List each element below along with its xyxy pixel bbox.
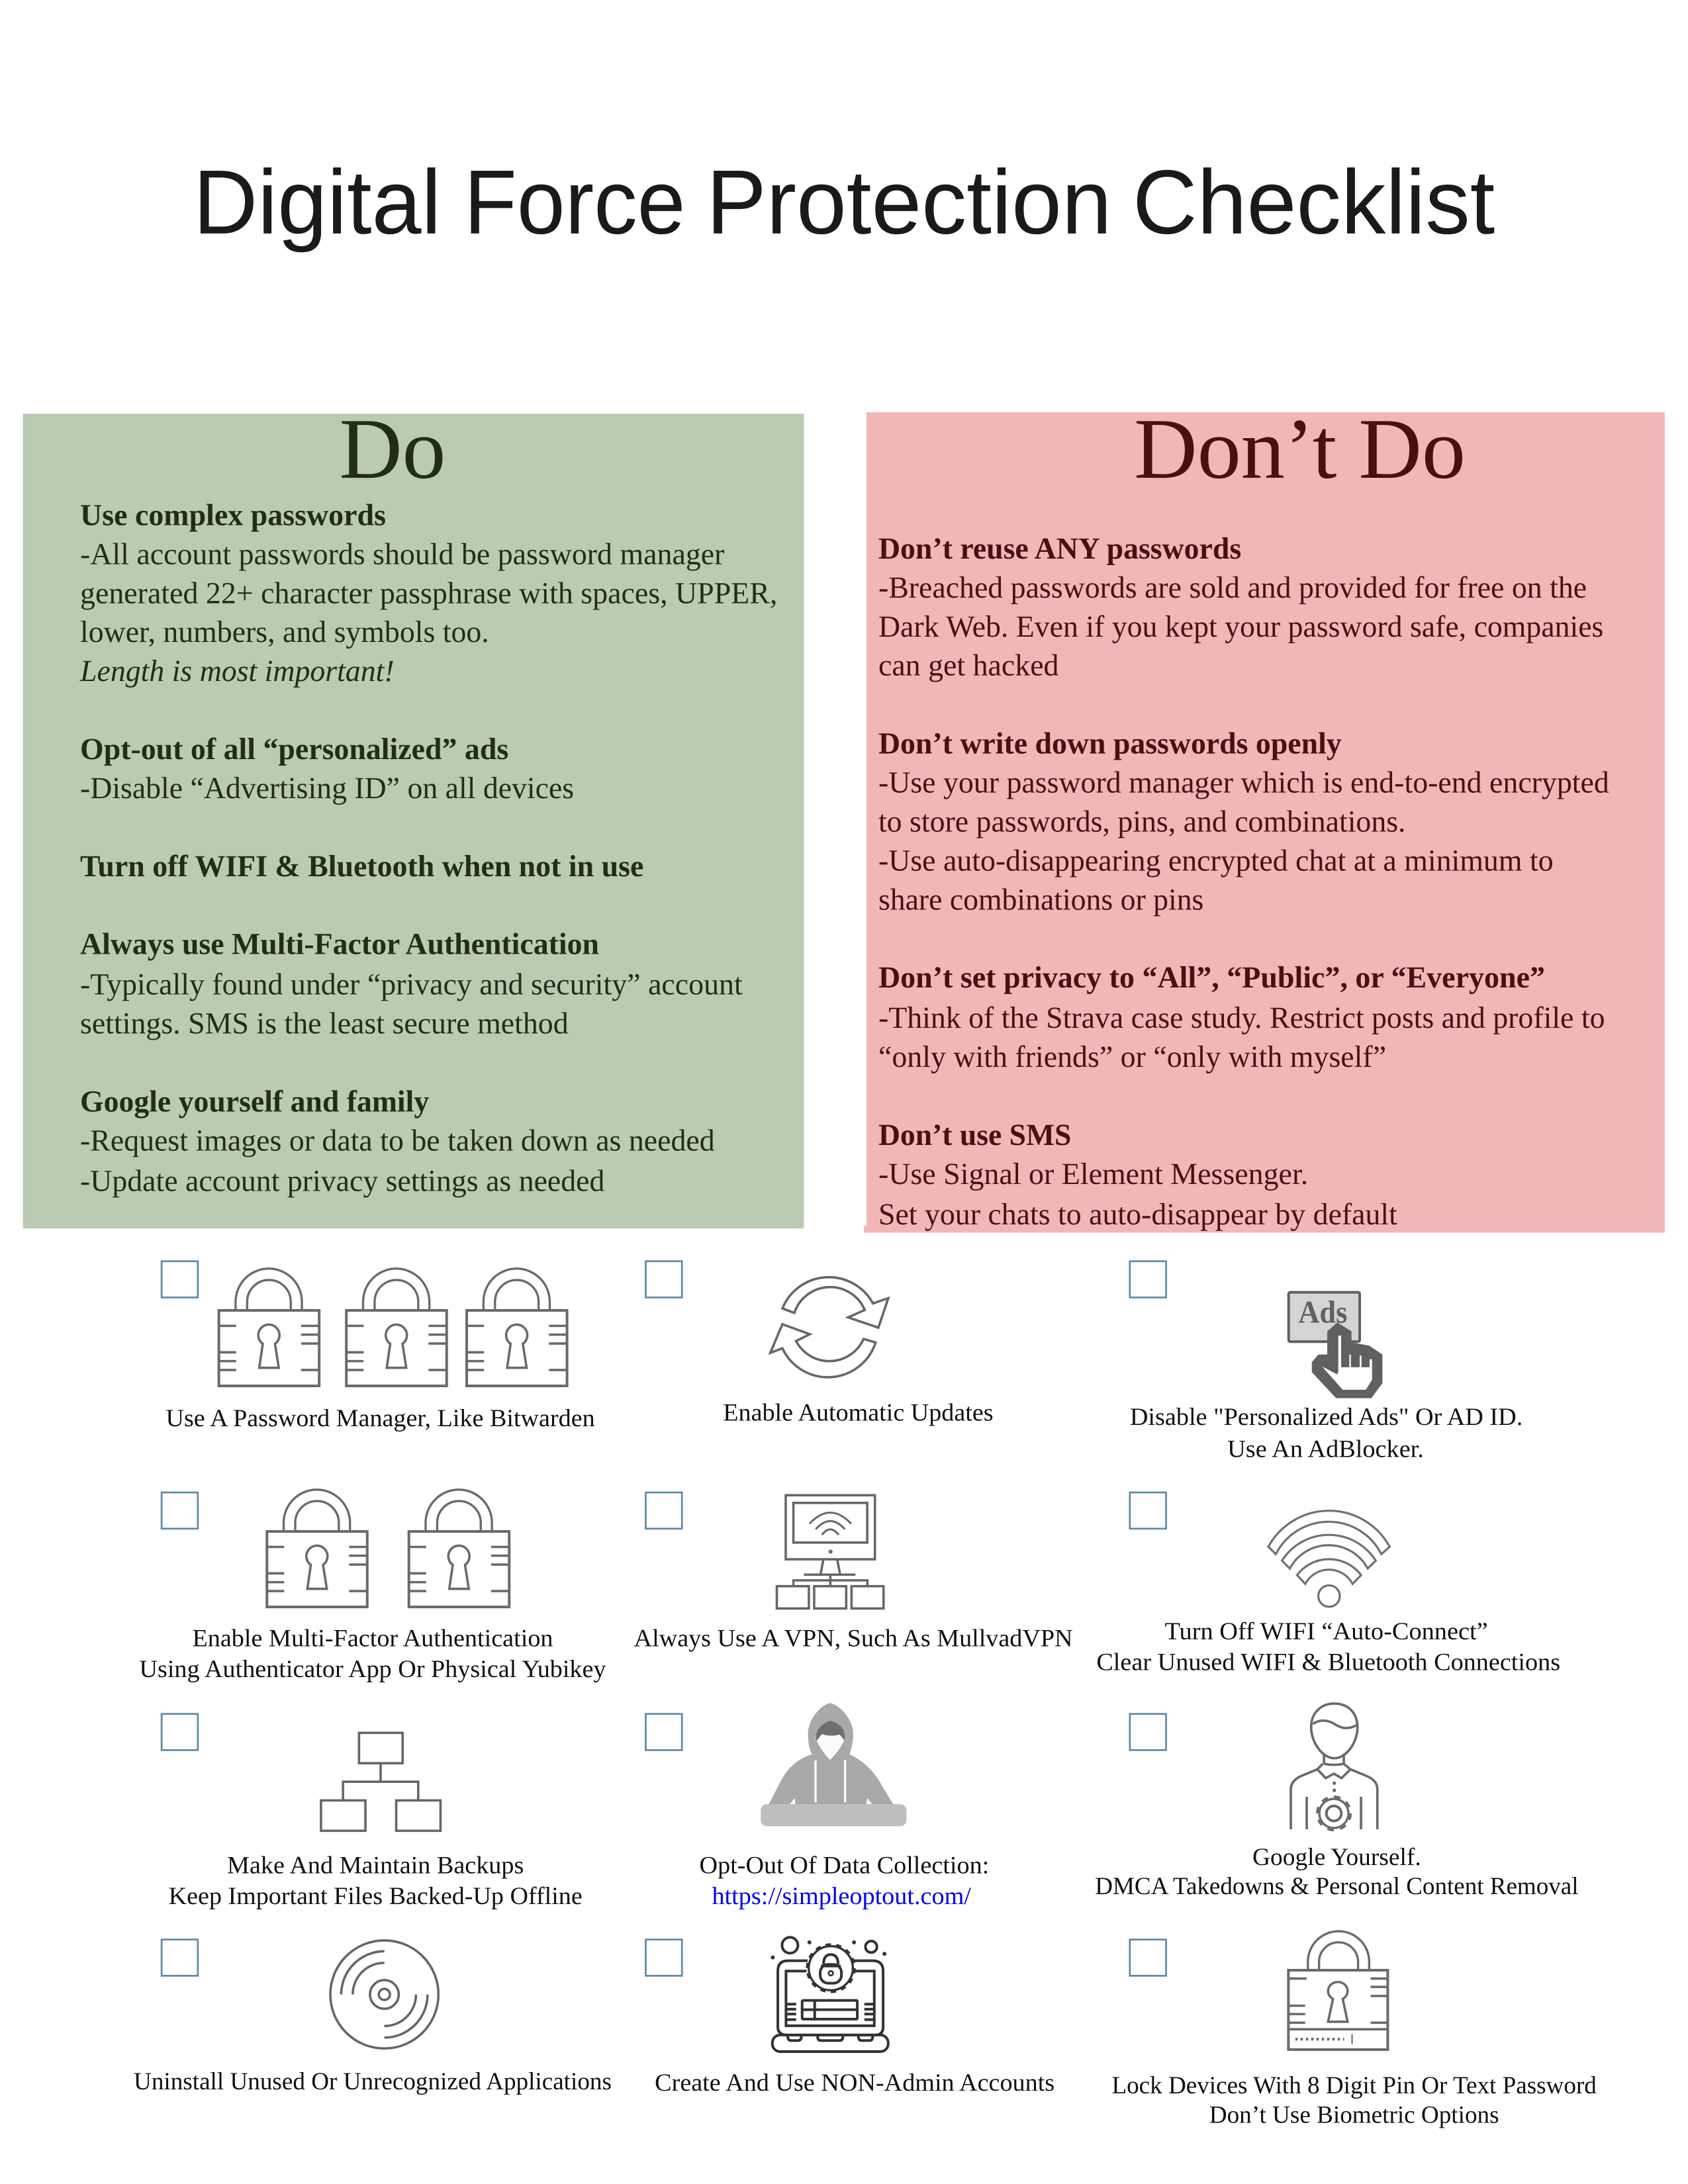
label: Keep Important Files Backed-Up Offline	[169, 1882, 583, 1909]
do item: multi-factor	[80, 927, 743, 1040]
label: Create And Use NON-Admin Accounts	[655, 2068, 1055, 2096]
label: Make And Maintain Backups	[227, 1851, 524, 1879]
title: Protection	[706, 152, 1111, 253]
label: Turn Off WIFI “Auto-Connect”	[1164, 1617, 1488, 1645]
label	[700, 1851, 989, 1909]
do item: complex passwords: generated 22+ character passphrase with spaces, UPPER,	[80, 575, 777, 610]
checkbox	[162, 1492, 198, 1529]
icon: laptop with gear lock	[771, 1937, 888, 2052]
don't item: reuse: -Breached passwords are sold and provided for free on the	[878, 570, 1587, 604]
do item: multi-factor: Always use Multi-Factor Authentication	[80, 927, 599, 961]
don't item: reuse	[878, 531, 1603, 682]
checkbox	[1130, 1261, 1166, 1297]
label: Lock Devices With 8 Digit Pin Or Text Password	[1111, 2071, 1597, 2099]
checkbox	[645, 1261, 682, 1297]
don't item: privacy	[878, 960, 1605, 1074]
icon: padlock with pin field	[1288, 1931, 1387, 2050]
don't item: reuse: Dark Web. Even if you kept your password safe, companies	[878, 609, 1603, 643]
label	[1130, 1402, 1523, 1463]
don't item: sms: -Use Signal or Element Messenger.	[878, 1156, 1308, 1191]
icon: hooded figure	[761, 1703, 906, 1826]
checkbox	[645, 1940, 682, 1976]
label: Clear Unused WIFI & Bluetooth Connections	[1096, 1648, 1560, 1676]
do item: complex passwords: Use complex passwords	[80, 497, 387, 532]
label: Disable "Personalized Ads" Or AD ID.	[1130, 1402, 1523, 1430]
label: Google Yourself.	[1252, 1843, 1421, 1870]
don't item: privacy: -Think of the Strava case study. Restrict posts and profile to	[878, 1000, 1605, 1035]
label	[1111, 2071, 1597, 2128]
checkbox	[1130, 1492, 1166, 1529]
don't item: write down: -Use auto-disappearing encrypted chat at a minimum to	[878, 842, 1554, 878]
checkbox	[162, 1714, 198, 1750]
label: Using Authenticator App Or Physical Yubikey	[139, 1655, 606, 1682]
label: DMCA Takedowns & Personal Content Removal	[1095, 1872, 1579, 1900]
don't item: privacy: Don’t set privacy to “All”, “Public”, or “Everyone”	[878, 960, 1545, 995]
title: Digital	[193, 152, 442, 253]
label: Always Use A VPN, Such As MullvadVPN	[634, 1624, 1073, 1652]
icon: monitor network	[777, 1495, 884, 1608]
label	[1096, 1617, 1560, 1676]
label: Uninstall Unused Or Unrecognized Applications	[134, 2067, 612, 2095]
do item: complex passwords: Length is most important!	[79, 653, 395, 688]
label: Don’t Use Biometric Options	[1209, 2101, 1499, 2128]
don't item: sms	[878, 1117, 1397, 1231]
do item: multi-factor: settings. SMS is the least secure method	[80, 1006, 569, 1040]
don't item: write down: Don’t write down passwords openly	[878, 725, 1342, 760]
label: https://simpleoptout.com/	[712, 1882, 971, 1909]
don't item: reuse: Don’t reuse ANY passwords	[878, 531, 1242, 565]
checklist item: data collection	[645, 1703, 989, 1909]
don't panel background	[864, 412, 1665, 1233]
checkbox	[1130, 1940, 1166, 1976]
do item: complex passwords: lower, numbers, and symbols too.	[80, 614, 489, 649]
checklist item: vpn	[634, 1492, 1073, 1652]
icon: three padlocks	[219, 1269, 567, 1386]
checklist item: uninstall	[134, 1940, 612, 2095]
do item: google yourself: Google yourself and family	[80, 1083, 429, 1118]
do item: personalized ads	[80, 731, 574, 805]
do item: multi-factor: -Typically found under “privacy and security” account	[80, 967, 743, 1001]
don't item: privacy: “only with friends” or “only with myself”	[878, 1039, 1386, 1074]
checklist item: backups	[162, 1714, 583, 1909]
panel: do	[23, 402, 804, 1228]
do item: complex passwords: -All account passwords should be password manager	[80, 536, 726, 571]
checkbox	[162, 1940, 198, 1976]
label: Use An AdBlocker.	[1227, 1435, 1424, 1463]
icon: person with gear	[1291, 1704, 1378, 1830]
don't item: write down	[878, 725, 1609, 917]
checklist item: wifi	[1096, 1492, 1560, 1676]
label	[1095, 1843, 1579, 1900]
label	[139, 1624, 606, 1682]
icon: ads click	[1289, 1293, 1382, 1398]
do item: google yourself: -Update account privacy settings as needed	[80, 1163, 604, 1198]
checklist item: personalized ads	[1130, 1261, 1523, 1463]
checklist item: non-admin	[645, 1937, 1055, 2096]
don't item: write down: to store passwords, pins, and combinations.	[878, 803, 1406, 839]
icon: network hierarchy	[321, 1733, 440, 1831]
do item: personalized ads: Opt-out of all “personalized” ads	[80, 731, 509, 766]
checkbox	[645, 1492, 682, 1529]
do item: complex passwords	[79, 497, 777, 688]
icon: ads click: Ads	[1298, 1295, 1347, 1330]
checklist item: automatic updates	[645, 1261, 994, 1426]
do heading: Do	[339, 402, 445, 497]
icon: refresh arrows	[771, 1277, 888, 1377]
icon: disc	[330, 1940, 438, 2048]
icon: wifi	[1268, 1511, 1389, 1607]
don't item: sms: Don’t use SMS	[878, 1117, 1071, 1152]
don't item: sms: Set your chats to auto-disappear by default	[878, 1197, 1397, 1231]
label: Use A Password Manager, Like Bitwarden	[165, 1404, 595, 1432]
do item: personalized ads: -Disable “Advertising ID” on all devices	[80, 770, 574, 805]
don't item: write down: share combinations or pins	[878, 882, 1203, 917]
label	[169, 1851, 583, 1909]
label: Enable Multi-Factor Authentication	[192, 1624, 553, 1652]
don't heading: Don’t Do	[1134, 402, 1466, 497]
title: Checklist	[1133, 152, 1495, 253]
do item: google yourself: -Request images or data to be taken down as needed	[80, 1122, 715, 1158]
checkbox	[645, 1714, 682, 1750]
checkbox	[162, 1261, 198, 1297]
icon: two padlocks	[267, 1490, 509, 1607]
label: Opt-Out Of Data Collection:	[700, 1851, 989, 1879]
checklist item: multi-factor	[139, 1490, 606, 1682]
title: Force	[464, 152, 685, 253]
checkbox	[1130, 1714, 1166, 1750]
do item: wifi and bluetooth: Turn off WIFI & Bluetooth when not in use	[80, 848, 644, 883]
do item: google yourself	[80, 1083, 715, 1198]
don't item: reuse: can get hacked	[878, 648, 1058, 682]
checklist item: google yourself	[1095, 1704, 1579, 1900]
title	[193, 152, 1495, 253]
checklist item: password manager	[162, 1261, 595, 1432]
checklist item: lock devices	[1111, 1931, 1597, 2128]
panel: don't do	[864, 402, 1665, 1233]
don't item: write down: -Use your password manager which is end-to-end encrypted	[878, 764, 1609, 799]
label: Enable Automatic Updates	[723, 1398, 994, 1426]
do panel background	[23, 414, 804, 1228]
